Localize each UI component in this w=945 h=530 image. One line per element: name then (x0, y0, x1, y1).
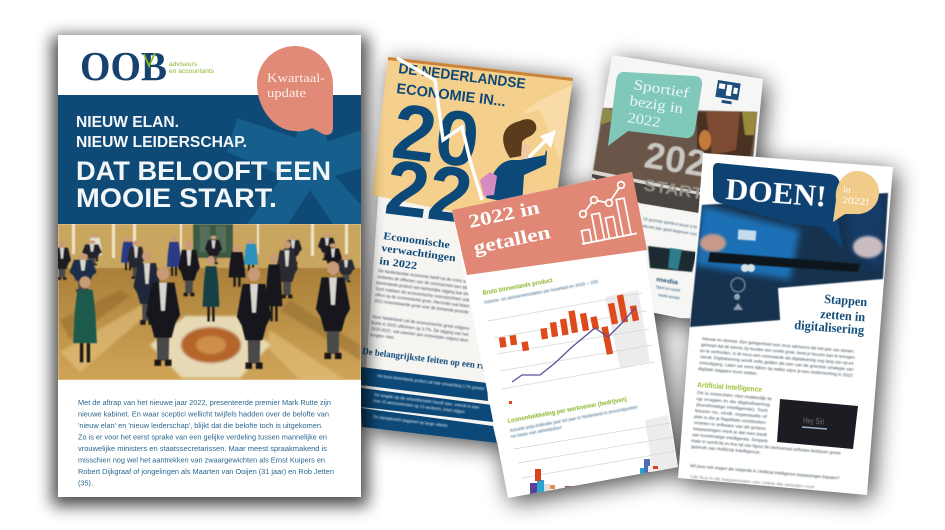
column text: kiezen nu, vindt, organisatie of (695, 408, 768, 419)
column text: maar er wordt bij on-line tal van liguur de werkvensal software-bedrijven groeit (691, 438, 842, 456)
heading: Stappen zetten in digitalisering: zetten in (820, 306, 867, 324)
logo OOB: adviseurs (169, 61, 197, 68)
dark sports image (648, 246, 697, 272)
chart 2 subtitle: na basis van arbeidsduur (510, 425, 563, 439)
body paragraph: vooruitgang. Laten we eens kijken op welke wijze je een onderneming in 2022 (699, 360, 853, 378)
chart 1: bars and line (488, 290, 655, 404)
floor streaks and carpet (60, 290, 360, 380)
headline (76, 114, 331, 213)
heading: Economische verwachtingen: verwachtingen (381, 243, 457, 264)
illustrated character (480, 119, 556, 205)
intro text: (35). (78, 478, 93, 488)
body paragraph: Voor Nederland zal de economische groei volgens (372, 314, 471, 331)
page (452, 172, 678, 498)
big year 20 22 (381, 87, 484, 240)
intro text: nieuwe kabinet. En waar sceptici wellicht twijfels hadden over de belofte van (78, 410, 329, 418)
fact row text: Het bruto binnenlands product zal naar verwachting 3,7% groeien (377, 373, 485, 391)
tan bubble text: in (843, 185, 851, 196)
body paragraph: Toch hebben de economische vooruitzichten ook (375, 286, 471, 303)
big year 20 22: 20 (388, 87, 484, 184)
soft shadows behind the tilted documents (366, 60, 897, 503)
page (678, 153, 893, 495)
fact row text: De krapte op de arbeidsmarkt houdt aan, vooral in een (374, 392, 480, 410)
page base (590, 55, 763, 320)
intro text (78, 398, 334, 488)
column text: Life Bus in de toepassingen van online die woorden voor (690, 474, 816, 490)
small heading and lines: media worden (658, 292, 680, 300)
white page (58, 35, 361, 497)
navy hero panel (58, 95, 361, 224)
text lines under photo (642, 216, 700, 237)
bubble text: bezig in (628, 93, 685, 118)
main page shadow (52, 36, 368, 506)
subheading: Artificial Intelligence: Artificial Intelligence (697, 380, 762, 394)
body paragraph: De Nederlandse economie heeft na de crisis weer (378, 268, 473, 285)
column text: plek in die je flagellatie voortbreken (694, 414, 767, 425)
headline: MOOIE START. (76, 183, 277, 213)
icon: small logo (715, 80, 741, 105)
small heading and lines: Sport en social (656, 284, 680, 293)
body paragraph (370, 268, 473, 343)
salmon header band (452, 172, 647, 275)
fact row text: De inkoopkracht stagneert op lange uitkeks (373, 414, 449, 428)
body paragraph: Nieuwe en slimmer. Een gelegenheid voor onze adviseurs die het jaar van starten. (702, 336, 855, 354)
bubble text: Kwartaal-update: update (267, 85, 306, 100)
column text: Dit is misschien niet makkelijk te (697, 390, 773, 401)
intro text: Met de aftrap van het nieuwe jaar 2022, presenteerde premier Mark Rutte zijn (78, 398, 331, 407)
body paragraph (698, 336, 855, 378)
heading: De belangrijkste feiten: De belangrijkste feiten op een rij (362, 347, 487, 372)
dark Hey Siri image (777, 399, 858, 449)
teal speech bubble (608, 72, 702, 146)
logo OOB: OOB (80, 43, 167, 89)
road text 202 START: 202 (642, 134, 709, 185)
heading: De Nederlandse economie in: ECONOMIE IN... (396, 81, 507, 110)
body paragraph: ondanks de effecten van de coronacrisis een sterk (377, 274, 473, 291)
body paragraph: 2021 bovenstaande groei voor de komende periode (374, 298, 469, 315)
body paragraph: Rutte in 2022 uitkomen op 3,7%. De stijging van het (371, 320, 469, 337)
big year 20 22: 22 (381, 143, 477, 240)
white zigzag arrow (397, 58, 548, 200)
chart 2 title: Loonontwikkeling per werknemer (bedrijven) (507, 396, 627, 425)
heading: De Nederlandse economie in: DE NEDERLANDSE (398, 61, 527, 93)
heading: De Nederlandse economie in (396, 61, 527, 110)
tan bubble text: 2022! (842, 196, 869, 208)
small heading and lines: media (656, 277, 679, 287)
small heading and lines (656, 277, 680, 300)
runner in photo (697, 112, 757, 160)
body paragraph: effect op de economische groei. Hieronder wat feiten (375, 292, 470, 309)
column text: van kunstmatige intelligentie. Simpele (692, 432, 769, 443)
body paragraph: binnenlands product een behoorlijke stijging laat zien (376, 280, 471, 297)
image caption: Hey Siri: Hey Siri (803, 416, 825, 427)
text lines under photo: De gezonde sportieve keuze is het (643, 216, 700, 230)
people (53, 233, 355, 369)
headline: DAT BELOOFT EEN (76, 156, 331, 186)
intro text: misschien nog wel het aantrekken van zwaargewichten als Ernst Kuipers en (78, 456, 325, 464)
body paragraph: en te verbreden, is de keus een voorwaarde als digitalisering nog lang van op en (700, 348, 854, 366)
text lines under photo: nieuwe jaar goed beginnen voor (642, 223, 698, 237)
bubble text: Sportief (632, 77, 690, 102)
column text: Wil jouw ook vragen die volgende A.I Artificial Intelligence toepassingen bepalen? (690, 463, 840, 481)
column text: (kunstmatige intelligentie). Toch (696, 402, 769, 413)
chart 2: partial bars (514, 415, 678, 498)
bubble text: Kwartaal-update (267, 70, 325, 100)
chart 1 subtitle: Volume- en seizoensmutaties per kwartaal en 2015 = 100 (483, 279, 599, 305)
navy fact rows (361, 367, 497, 443)
header title: 2022 in (467, 197, 542, 233)
header title (467, 197, 553, 259)
body paragraph: vanaf. Digitalisering wordt zelfs gelden als een van de grootste strategie van (700, 354, 854, 372)
fact row text (373, 373, 485, 428)
chart 2 subtitle: Actuele prijs-indicatie jaar tot jaar in Nederland in procentpunten (509, 404, 638, 433)
road photo (592, 108, 757, 225)
intro text: vrouwelijke ministers en staatssecretarissen. Maar meest spraakmakend is (78, 444, 327, 453)
document: De Nederlandse economie in 2022 (361, 57, 573, 443)
road text 202 START: START (642, 177, 705, 203)
bubble text: Kwartaal-update: Kwartaal- (267, 70, 325, 85)
heading: Stappen zetten in digitalisering: digitalisering (794, 317, 865, 337)
column text: op vragen in de digitalisering (696, 396, 771, 407)
intro text: Zo is er voor het eerst sprake van een gelijke verdeling tussen mannelijke en (78, 432, 327, 442)
body paragraph: 2019-2023 ; ook wanneer aan consumptie volgens deze (371, 326, 469, 343)
logo OOB: en accountants (169, 68, 214, 75)
yellow cover area (372, 57, 573, 230)
bubble text (626, 77, 690, 131)
body paragraph: gehoopt dat de kennis 2g houden een snelle groei, leest je keuzes aan te brengen (701, 342, 855, 360)
heading: Stappen zetten in digitalisering: Stappen (824, 291, 869, 309)
page base (362, 57, 573, 443)
column text (690, 390, 842, 490)
fact row text: hoor 15 werkzoekenden op 13 vacatures, lonen stijgen (373, 398, 465, 414)
bubble text: 2022 (626, 110, 661, 131)
intro text: Robert Dijkgraaf of jongelingen als Maarten van Ooijen (31 jaar) en Rob Jetten (78, 467, 334, 476)
column text: toepassingen merk je dat men biedt (693, 426, 768, 437)
main brochure cover (53, 35, 361, 497)
document: Doen in 2022 (678, 153, 893, 495)
logo OOB (80, 43, 214, 89)
cabinet group photo (53, 224, 361, 380)
heading: Economische verwachtingen (379, 231, 457, 272)
DOEN title: DOEN! (724, 171, 828, 214)
document: 2022 in getallen (452, 172, 678, 498)
icon: chart with bars and line (575, 182, 637, 244)
headline: NIEUW ELAN. (76, 114, 179, 131)
header title: getallen (472, 222, 553, 259)
heading: Stappen zetten in digitalisering (794, 291, 869, 337)
photo details (690, 195, 885, 325)
document: Sportief bezig in 2022 (590, 55, 763, 320)
heading: Economische verwachtingen: Economische (383, 231, 451, 251)
intro text: 'nieuw elan' en 'nieuw leiderschap', blijkt dat die belofte toch is uitgekomen. (78, 421, 323, 430)
headline: NIEUW LEIDERSCHAP. (76, 134, 247, 151)
column text: gebruik van Artificial Intelligence. (691, 444, 761, 455)
heading: Economische verwachtingen: in 2022 (379, 256, 418, 272)
navy speech bubble (713, 163, 843, 248)
body paragraph: bogen niet. (370, 332, 395, 340)
star decoration (227, 118, 361, 224)
salmon speech bubble (257, 46, 333, 135)
tan speech bubble (833, 171, 879, 222)
column text: moeten in software van de grotere (694, 420, 767, 431)
tan bubble text (842, 185, 869, 208)
body paragraph: digitale stappen kunt zetten. (698, 366, 758, 376)
chart 1 title: Bruto binnenlands product (482, 277, 554, 297)
technology photo (690, 193, 888, 327)
